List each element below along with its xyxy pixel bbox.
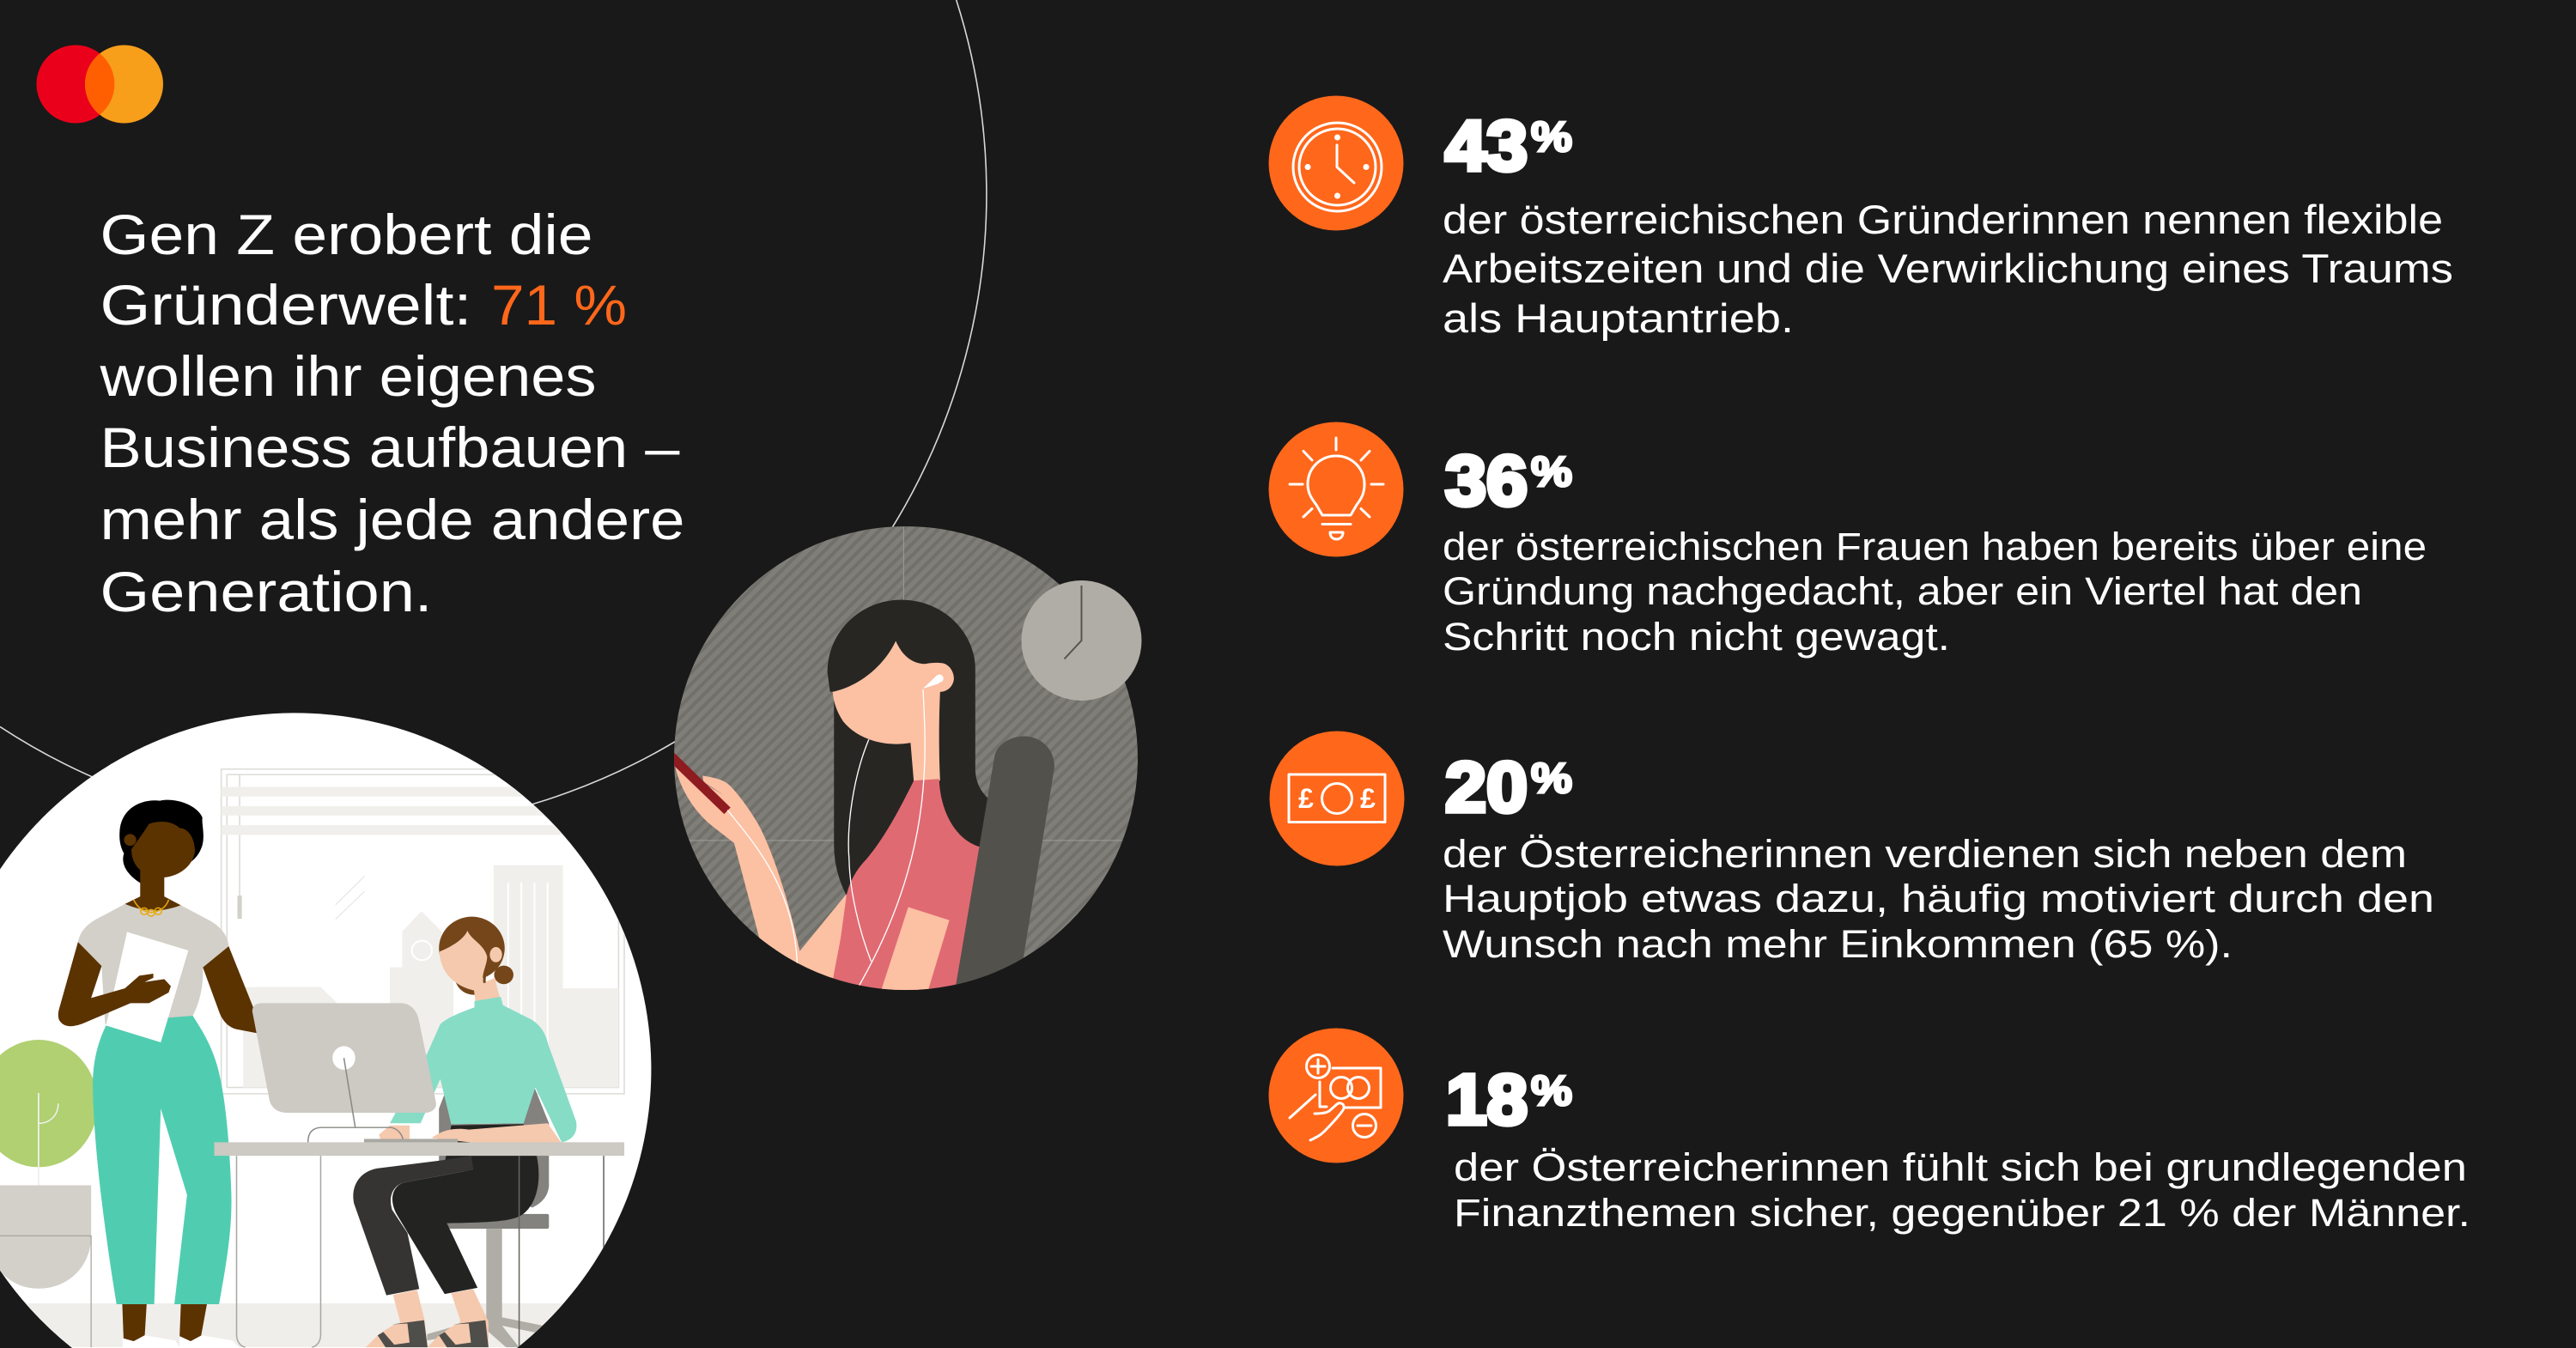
pink top	[833, 779, 981, 991]
stat 1: number: %	[1531, 114, 1572, 161]
stat 2: number	[1445, 440, 1572, 520]
headline	[99, 203, 684, 623]
window and skyline	[222, 769, 624, 1094]
logo: two overlapping circles	[36, 45, 163, 124]
face and neck	[833, 641, 954, 782]
stat 1: text: Arbeitszeiten und die Verwirklichung eines Traums	[1443, 246, 2453, 291]
stat 1: number: 43	[1445, 106, 1528, 185]
stat 1: icon clock	[1269, 96, 1403, 230]
stat 3: text: der Österreicherinnen verdienen sich neben dem	[1443, 832, 2407, 876]
stat 2: text: der österreichischen Frauen haben bereits über eine	[1443, 525, 2427, 568]
stat 4: text	[1454, 1145, 2470, 1235]
wall clock	[1022, 580, 1142, 701]
headline: wollen ihr eigenes	[99, 344, 596, 408]
chest skin	[881, 907, 950, 991]
office chair	[427, 1088, 549, 1347]
stat 1: text: als Hauptantrieb.	[1443, 295, 1794, 341]
headline: mehr als jede andere	[100, 488, 685, 551]
desk	[214, 1142, 624, 1347]
stat 2: text: Schritt noch nicht gewagt.	[1443, 615, 1950, 659]
stat 4: number: %	[1531, 1068, 1572, 1114]
stat 4: text: der Österreicherinnen fühlt sich bei grundlegenden	[1454, 1145, 2467, 1189]
decorative thin arc circle	[0, 0, 987, 831]
keyboard	[364, 1139, 458, 1143]
stat 2: number: %	[1531, 449, 1572, 495]
stat 3: number: 20	[1445, 747, 1528, 827]
stat 2: text	[1443, 525, 2427, 659]
headline: Gründerwelt:	[100, 273, 472, 337]
stat 4: text: Finanzthemen sicher, gegenüber 21 % der Männer.	[1454, 1191, 2470, 1235]
headline: 71 %	[491, 273, 627, 337]
stat 1: text	[1443, 197, 2453, 341]
stat 1: number	[1445, 106, 1572, 185]
seated woman	[353, 917, 576, 1347]
seat back	[955, 736, 1054, 991]
stat 3: text: Wunsch nach mehr Einkommen (65 %).	[1443, 922, 2233, 966]
stat 4: icon hand with banknote	[1269, 1029, 1403, 1163]
headline: Business aufbauen –	[100, 416, 680, 479]
laptop stand cable	[308, 1127, 403, 1142]
stat 2: text: Gründung nachgedacht, aber ein Viertel hat den	[1443, 569, 2362, 613]
headline: Gen Z erobert die	[100, 203, 592, 266]
standing woman	[58, 800, 258, 1347]
plant	[0, 1040, 98, 1347]
hair	[828, 600, 993, 896]
stat 3: number	[1445, 747, 1572, 827]
headline: Generation.	[100, 560, 433, 623]
stat 4: number: 18	[1446, 1060, 1528, 1139]
laptop	[252, 1003, 436, 1127]
stat 2: number: 36	[1445, 440, 1528, 520]
arm and hand	[675, 766, 799, 966]
stat 3: icon banknote	[1269, 732, 1405, 865]
phone	[674, 752, 731, 814]
stat 3: icon banknote: £	[1360, 783, 1376, 814]
stat 2: icon light bulb	[1269, 422, 1403, 556]
illustration: woman with phone in grey circle	[669, 526, 1142, 991]
stat 3: number: %	[1531, 756, 1572, 802]
earphone wires	[727, 689, 925, 987]
stat 3: text	[1443, 832, 2434, 966]
stat 1: text: der österreichischen Gründerinnen nennen flexible	[1443, 197, 2443, 242]
floor	[26, 1303, 563, 1347]
stat 3: text: Hauptjob etwas dazu, häufig motiviert durch den	[1443, 877, 2434, 920]
illustration: two women at a desk in white circle	[0, 713, 651, 1348]
stat 4: number	[1446, 1060, 1572, 1139]
stat 3: icon banknote: £	[1298, 783, 1314, 814]
